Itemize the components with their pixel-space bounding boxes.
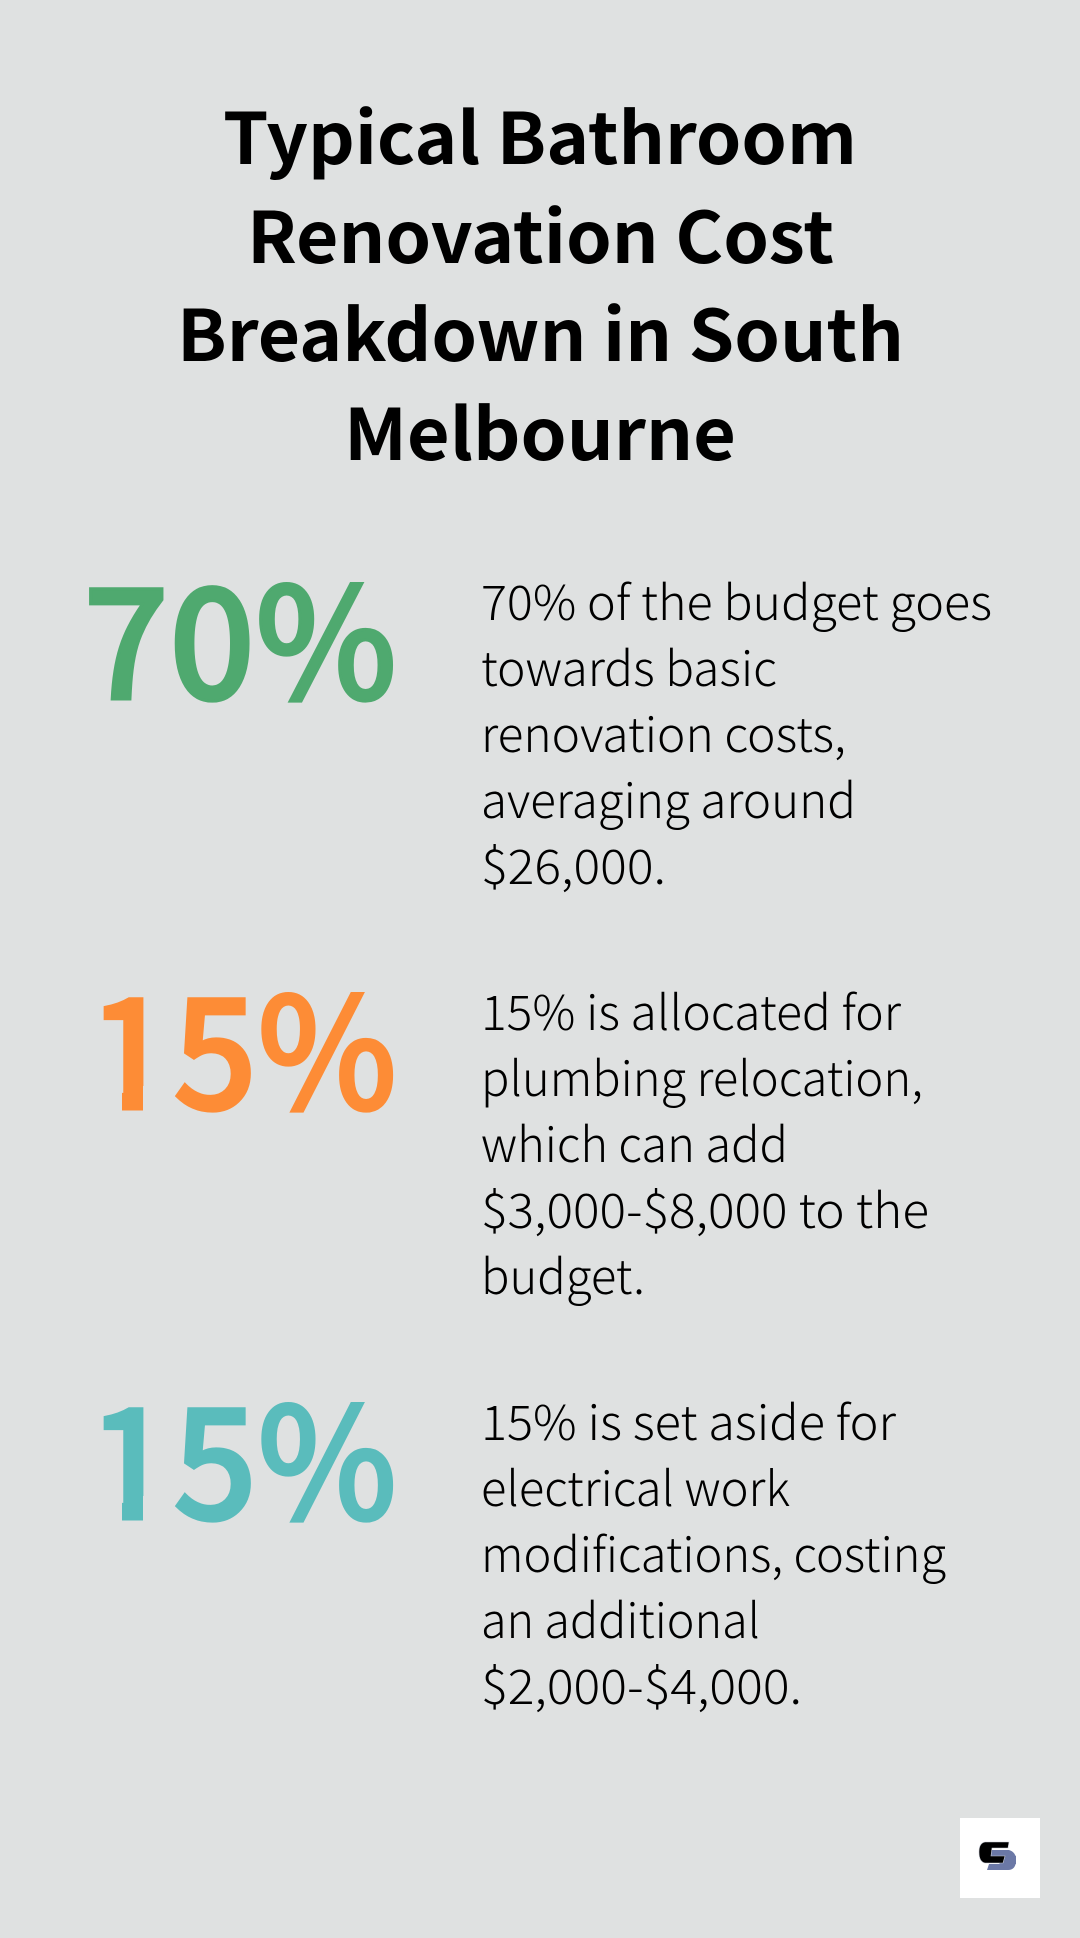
stat: 15% teal: 15%	[88, 1341, 397, 1564]
text: basic renovation description: 70% of the budget goes	[481, 564, 992, 634]
title: Melbourne	[344, 379, 736, 481]
panel: basic renovation costs	[83, 521, 992, 898]
title: Typical Bathroom	[223, 83, 857, 185]
text: electrical description: 15% is set aside for	[481, 1384, 897, 1454]
text: electrical description: $2,000-$4,000.	[481, 1648, 802, 1718]
text: basic renovation description: towards basic	[481, 630, 777, 700]
text: plumbing description	[481, 974, 929, 1308]
text: plumbing description: plumbing relocation,	[481, 1040, 923, 1110]
text: plumbing description: budget.	[481, 1238, 645, 1308]
panel: electrical work	[88, 1341, 946, 1718]
icon: logo	[960, 1818, 1040, 1898]
text: electrical description: an additional	[481, 1582, 760, 1652]
text: basic renovation description: averaging around	[481, 762, 856, 832]
text: electrical description	[481, 1384, 946, 1718]
text: plumbing description: 15% is allocated for	[481, 974, 902, 1044]
panel: plumbing relocation	[88, 931, 929, 1308]
text: electrical description: modifications, costing	[481, 1516, 946, 1586]
stat: 70%: 70%	[83, 521, 397, 744]
title: Breakdown in South	[177, 280, 904, 382]
text: electrical description: electrical work	[481, 1450, 790, 1520]
stat: 15% orange: 15%	[88, 931, 397, 1154]
text: basic renovation description: renovation costs,	[481, 696, 846, 766]
title	[177, 83, 904, 481]
text: basic renovation description: $26,000.	[481, 828, 666, 898]
text: plumbing description: $3,000-$8,000 to the	[481, 1172, 929, 1242]
title: Renovation Cost	[247, 182, 834, 284]
text: basic renovation description	[481, 564, 992, 898]
text: plumbing description: which can add	[481, 1106, 788, 1176]
